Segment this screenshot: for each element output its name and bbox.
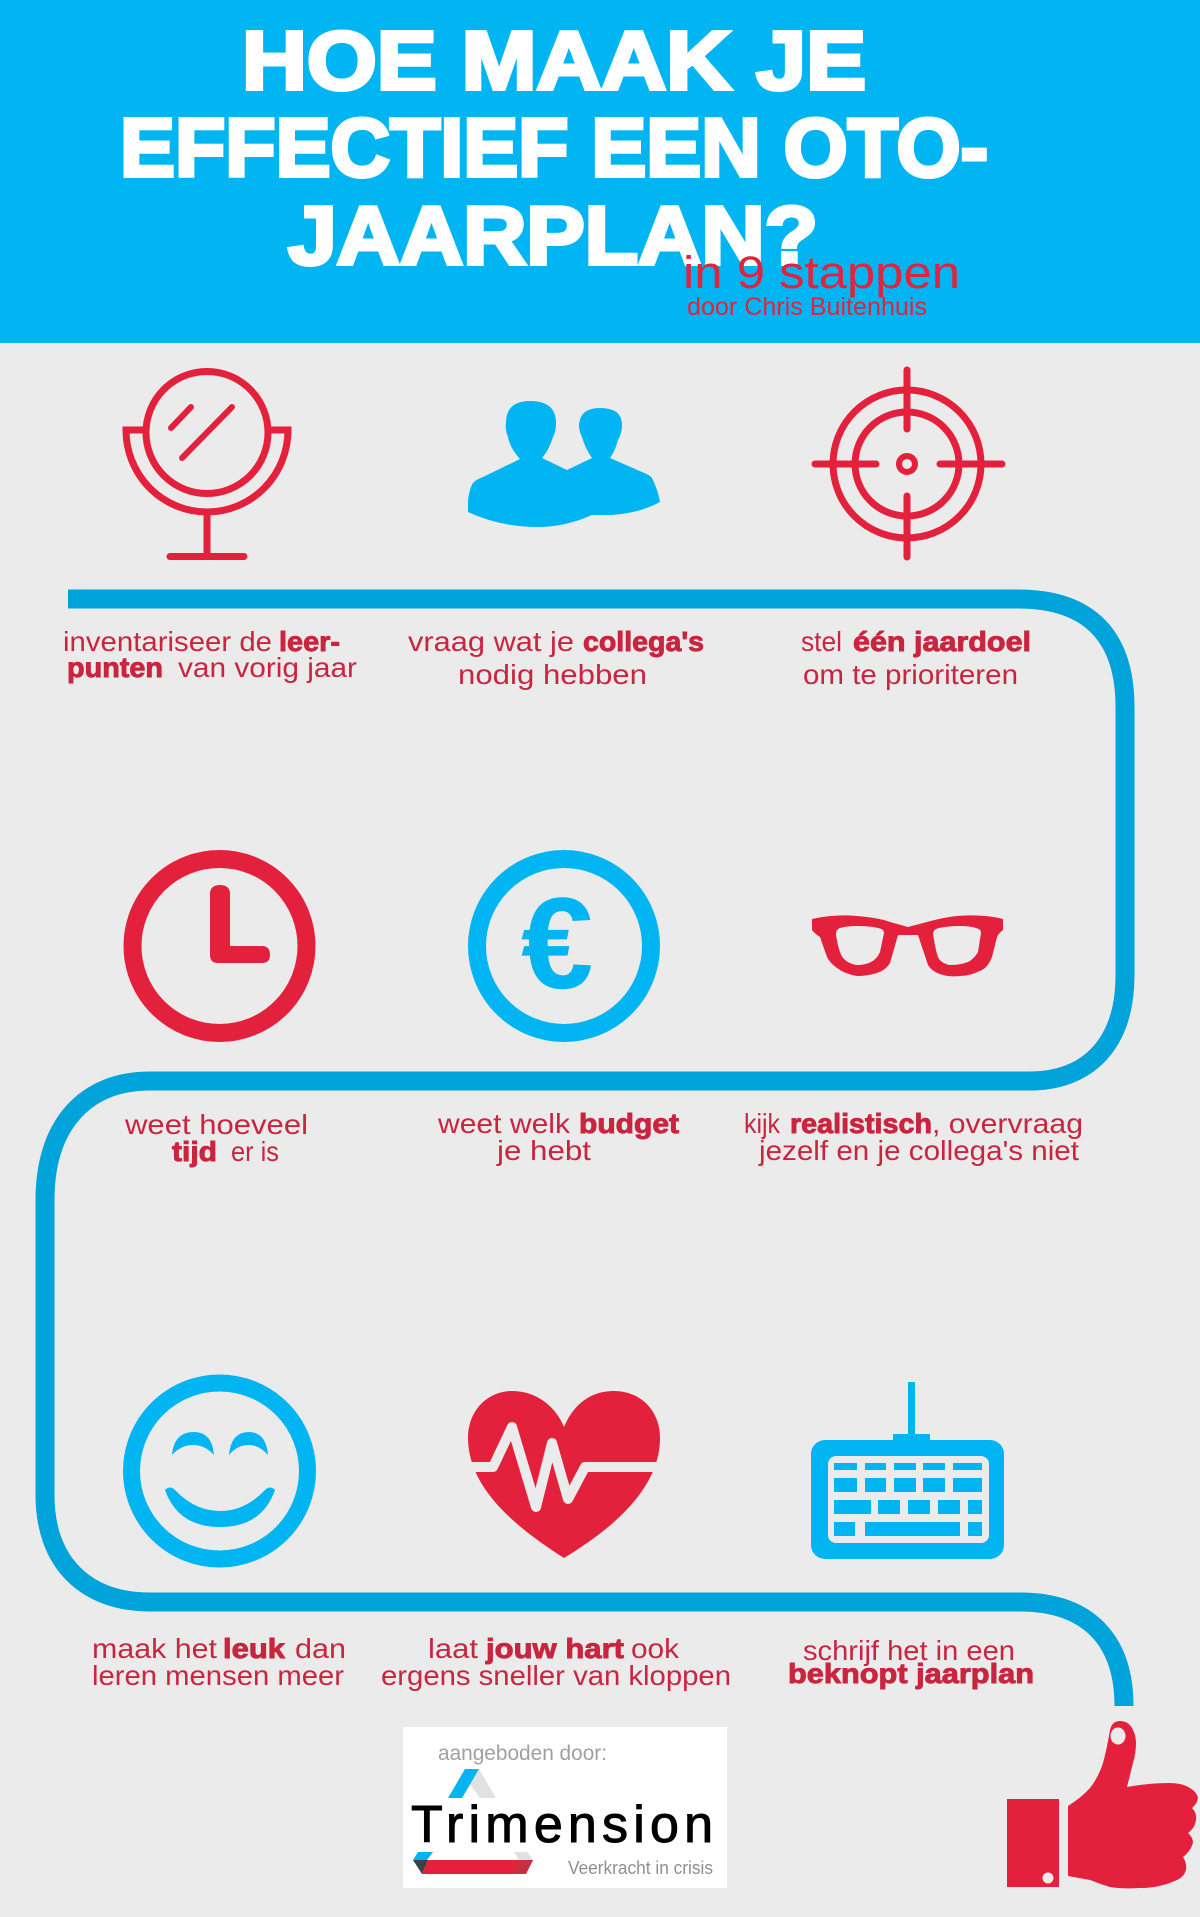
icon: clock xyxy=(132,859,306,1033)
step 1 text: leer- xyxy=(279,626,340,657)
step 7 text: leuk xyxy=(223,1633,285,1664)
step 3 text xyxy=(801,626,1031,690)
step 6 text: jezelf en je collega's niet xyxy=(758,1135,1079,1166)
logo mark top xyxy=(448,1769,496,1798)
icon: smiley xyxy=(132,1383,308,1559)
step 8 text: ergens sneller van kloppen xyxy=(381,1660,731,1691)
title: JAARPLAN? xyxy=(288,189,818,282)
subtitle: in 9 stappen xyxy=(683,247,960,298)
tagline: Veerkracht in crisis xyxy=(568,1858,713,1878)
header banner xyxy=(0,0,1200,343)
step 9 text: beknopt jaarplan xyxy=(788,1658,1034,1689)
step 6 text: , overvraag xyxy=(932,1108,1083,1139)
icon: target xyxy=(815,370,1002,557)
step 6 text xyxy=(744,1108,1083,1166)
step 2 text xyxy=(408,626,704,690)
title: HOE MAAK JE xyxy=(242,14,866,107)
step 7 text: maak het xyxy=(92,1633,217,1664)
step 1 text: inventariseer de xyxy=(63,626,272,657)
author: door Chris Buitenhuis xyxy=(687,293,927,321)
title: EFFECTIEF EEN OTO- xyxy=(120,101,988,194)
step 4 text: er is xyxy=(231,1136,279,1167)
step 6 text: realistisch xyxy=(790,1108,932,1139)
logo mark bottom xyxy=(413,1852,533,1874)
step 1 text: punten xyxy=(67,652,163,683)
logo card: Trimension xyxy=(403,1727,727,1888)
step 7 text: leren mensen meer xyxy=(92,1660,344,1691)
step 9 text xyxy=(788,1635,1034,1689)
step 3 text: één jaardoel xyxy=(853,626,1031,657)
icon: euro coin xyxy=(477,859,651,1033)
step 5 text xyxy=(437,1108,679,1166)
step 8 text xyxy=(381,1633,731,1691)
step 9 text: schrijf het in een xyxy=(803,1635,1015,1666)
step 8 text: jouw hart xyxy=(485,1633,624,1664)
step 3 text: stel xyxy=(801,626,842,657)
step 3 text: om te prioriteren xyxy=(803,659,1018,690)
icon: mirror xyxy=(126,372,288,556)
icon: euro coin: € xyxy=(521,870,593,1016)
icon: keyboard xyxy=(811,1382,1004,1559)
step 2 text: nodig hebben xyxy=(458,659,647,690)
step 5 text: je hebt xyxy=(496,1135,591,1166)
icon: glasses xyxy=(812,915,1003,976)
step 1 text xyxy=(63,626,357,683)
icon: people xyxy=(468,401,660,527)
step 2 text: vraag wat je xyxy=(408,626,574,657)
step 2 text: collega's xyxy=(583,626,704,657)
winding path xyxy=(45,599,1125,1706)
step 1 text: van vorig jaar xyxy=(178,652,357,683)
step 5 text: weet welk xyxy=(437,1108,571,1139)
title xyxy=(120,14,988,282)
step 4 text xyxy=(124,1109,308,1167)
step 4 text: tijd xyxy=(172,1136,217,1167)
icon: heart with pulse xyxy=(466,1391,662,1558)
icon: thumbs up xyxy=(1007,1721,1198,1888)
step 7 text: dan xyxy=(295,1633,346,1664)
step 5 text: budget xyxy=(579,1108,679,1139)
caption: offered by: aangeboden door: xyxy=(438,1742,607,1765)
step 4 text: weet hoeveel xyxy=(124,1109,308,1140)
step 8 text: laat xyxy=(428,1633,478,1664)
logo wordmark: Trimension xyxy=(411,1796,713,1854)
step 6 text: kijk xyxy=(744,1108,781,1139)
step 8 text: ook xyxy=(631,1633,680,1664)
step 7 text xyxy=(92,1633,346,1691)
